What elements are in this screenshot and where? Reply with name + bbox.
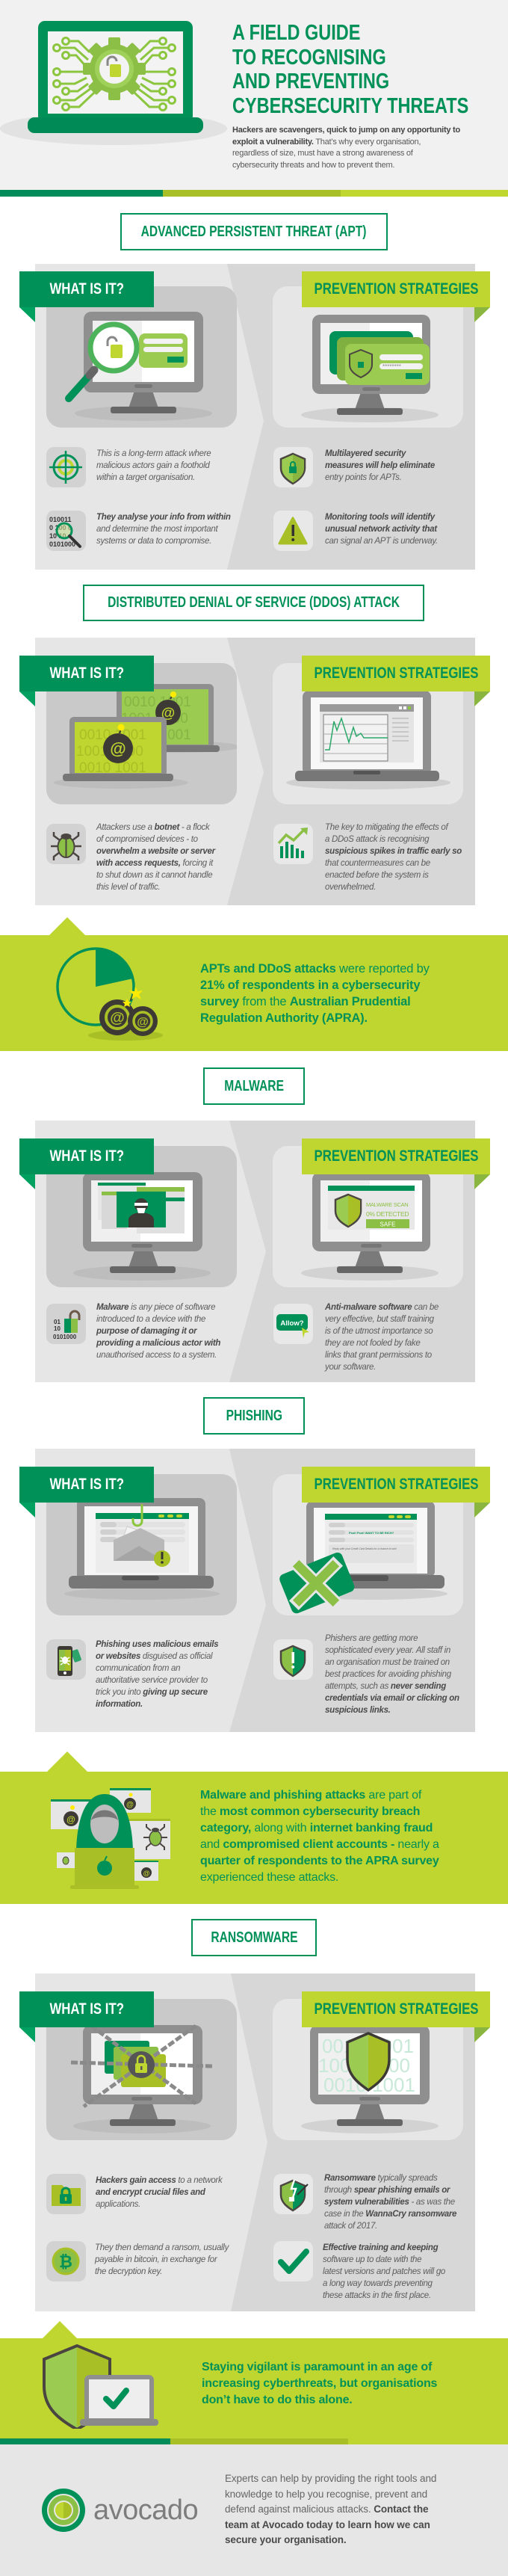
title: A FIELD GUIDE [232, 21, 360, 45]
text: APT what 1 [96, 449, 211, 482]
logo: avocado: avocado [93, 2495, 198, 2526]
text: APT prevention 1: entry points for APTs. [325, 473, 402, 482]
DDoS image: infected laptops: 1001 0100 [121, 711, 188, 727]
panel: Ransomware [35, 1973, 475, 2311]
icon: binary magnifier [46, 511, 86, 551]
icon: binary magnifier: 10 10 [49, 532, 66, 540]
stat text 1: Regulation Authority (APRA). [200, 1011, 368, 1025]
text: Phishing what: authoritative service provider to [96, 1676, 208, 1685]
Phishing image: blocked credit card: Psst! Psst! WANT TO BE RICH? [349, 1531, 394, 1535]
title: AND PREVENTING [232, 70, 389, 93]
hacker illustration [51, 1788, 170, 1889]
text: Ransomware what 1: applications. [96, 2200, 140, 2209]
DDoS image: infected laptops: @ [110, 739, 126, 758]
footer text: defend against malicious attacks. Contact the [225, 2503, 428, 2515]
icon: shield exclamation [273, 1639, 313, 1680]
DDoS image: infected laptops: 0010 1001 [124, 694, 191, 710]
stat text 1: survey from the Australian Prudential [200, 995, 410, 1008]
intro text: cybersecurity threats and how to prevent them. [232, 160, 394, 169]
section title: DDoS [83, 585, 424, 621]
logo: avocado [42, 2489, 198, 2532]
text: Ransomware prevention 2: a long way towards preventing [323, 2279, 433, 2288]
icon: binary magnifier: 010011 [49, 516, 72, 523]
text: DDoS prevention [325, 823, 462, 892]
text: APT what 2 [96, 513, 231, 546]
text: APT prevention 2 [325, 513, 438, 546]
text: Malware what: unauthorised access to a system. [96, 1351, 217, 1360]
icon: binary lock: 01 [54, 1319, 61, 1325]
closing text [202, 2361, 437, 2406]
text: DDoS what: overwhelm a website or server [96, 847, 215, 856]
text: DDoS prevention: enacted before the system is [325, 871, 429, 880]
text: Ransomware prevention 2: software up to date with the [323, 2255, 421, 2264]
intro text: Hackers are scavengers, quick to jump on any opportunity to [232, 126, 460, 135]
panel: DDoS [35, 638, 475, 905]
icon: binary magnifier: 0 100 0 [49, 524, 72, 531]
text: DDoS prevention: that countermeasures can be [325, 859, 430, 868]
Ransomware image: shield over binary: 0010 1001 [322, 2035, 414, 2057]
text: APT what 2: and determine the most important [96, 525, 217, 534]
section title: Phishing: PHISHING [226, 1407, 282, 1423]
text: Malware prevention: very effective, but staff training [325, 1315, 434, 1324]
text: Phishing prevention: suspicious links. [325, 1706, 391, 1715]
pie chart icon with bombs: @ [110, 1010, 125, 1026]
header background [0, 0, 508, 191]
text: Phishing what: Phishing uses malicious emails [96, 1640, 218, 1649]
text: DDoS what: of compromised devices - to [96, 835, 198, 844]
tab: what is it [19, 1138, 154, 1174]
Phishing image: blocked credit card: Reply with your Credit Card Details for a chance to win! [332, 1547, 397, 1550]
panel: APT [35, 264, 475, 570]
title: TO RECOGNISING [232, 45, 386, 69]
text: APT what 1: This is a long-term attack where [96, 449, 211, 458]
stat text 2: category, along with internet banking fraud [200, 1822, 433, 1834]
icon: bitcoin: ₿ [59, 2253, 72, 2272]
hacker illustration: 1001 [82, 1827, 122, 1847]
icon: binary lock: 0101000 [53, 1334, 77, 1340]
text: Malware what: providing a malicious actor with [96, 1339, 220, 1348]
Ransomware image: shield over binary: 1001 0100 [318, 2054, 410, 2077]
text: Ransomware prevention 2 [323, 2243, 445, 2300]
icon: locked folder [46, 2174, 86, 2214]
tab: what is it: WHAT IS IT? [49, 1476, 124, 1493]
title: CYBERSECURITY THREATS [232, 94, 468, 118]
icon: bug [46, 824, 86, 864]
text: Malware prevention: they are not fooled by fake [325, 1339, 420, 1348]
tab: what is it [19, 1991, 154, 2027]
text: Ransomware prevention 2: Effective training and keeping [323, 2243, 438, 2252]
text: DDoS prevention: a DDoS attack is recognising [325, 835, 429, 844]
text: APT prevention 1: measures will help eliminate [325, 461, 435, 470]
text: Phishing prevention: sophisticated every year. All staff in [325, 1646, 450, 1655]
header stripe [0, 190, 508, 197]
text: Phishing what: trick you into giving up secure [96, 1688, 208, 1697]
closing text: increasing cyberthreats, but organisations [202, 2377, 437, 2390]
stat text 2: and compromised client accounts - nearly a [200, 1838, 439, 1851]
icon: shield with lightning [273, 2174, 313, 2214]
DDoS image: infected laptops: 1001 0100 [76, 744, 143, 759]
Phishing image: blocked credit card [273, 1474, 463, 1615]
hacker illustration: 00 [86, 1848, 106, 1868]
text: DDoS prevention: suspicious spikes in traffic early so [325, 847, 462, 856]
icon: allow prompt: Allow? [280, 1319, 304, 1328]
icon: allow prompt [273, 1304, 313, 1344]
DDoS image: infected laptops: 0010 1001 [79, 727, 146, 743]
text: Malware prevention: your software. [325, 1363, 376, 1372]
tab: what is it [19, 1467, 154, 1503]
bottom stripe [0, 2438, 508, 2444]
text: Ransomware what 1: and encrypt crucial files and [96, 2188, 205, 2197]
text: DDoS prevention: The key to mitigating the effects of [325, 823, 447, 832]
Malware image: malware scan safe: 0% DETECTED [366, 1210, 409, 1218]
text: DDoS what [96, 823, 216, 892]
DDoS image: infected laptops: 0010 1001 [124, 727, 191, 743]
icon: phone with bug [46, 1639, 86, 1680]
APT image: secure login cards on monitor [273, 286, 463, 428]
Ransomware image: chained locked files [46, 1999, 237, 2140]
text: DDoS what: to shut down as it cannot handle [96, 871, 212, 880]
text: DDoS what: with access requests, forcing it [96, 859, 213, 868]
intro text: exploit a vulnerability. That’s why every organisation, [232, 138, 421, 147]
Malware image: hacker on monitor [46, 1146, 237, 1287]
text: Malware prevention: Anti-malware software can be [325, 1303, 439, 1312]
DDoS image: infected laptops: @ [161, 706, 175, 721]
tab: prevention strategies: PREVENTION STRATEGIES [314, 1147, 478, 1165]
tab: prevention strategies: PREVENTION STRATEGIES [314, 280, 478, 298]
text: APT prevention 1: Multilayered security [325, 449, 406, 458]
section title: Ransomware: RANSOMWARE [211, 1929, 297, 1945]
title [232, 21, 468, 118]
text: APT prevention 1 [325, 449, 435, 482]
APT image: secure login cards on monitor: ******** [382, 363, 401, 370]
section title: Ransomware [191, 1919, 317, 1956]
text: Malware what: purpose of damaging it or [96, 1327, 196, 1336]
section title: Malware: MALWARE [224, 1078, 284, 1094]
footer text: secure your organisation. [225, 2534, 347, 2545]
tab: prevention strategies [302, 656, 490, 691]
footer text: knowledge to help you recognise, prevent and [225, 2488, 427, 2500]
stat text 1 [200, 962, 430, 1025]
icon: binary lock: 10 [54, 1325, 61, 1332]
icon: bitcoin [46, 2241, 86, 2281]
icon: shield lock [273, 447, 313, 487]
text: Ransomware what 1 [96, 2176, 223, 2209]
closing text: Staying vigilant is paramount in an age of [202, 2361, 432, 2373]
stat text 1: APTs and DDoS attacks were reported by [200, 962, 430, 976]
text: DDoS prevention: overwhelmed. [325, 883, 376, 892]
stat text 2 [200, 1789, 439, 1884]
closing band [0, 2338, 508, 2438]
text: DDoS what: Attackers use a botnet - a flock [96, 823, 209, 832]
tab: prevention strategies [302, 271, 490, 307]
text: APT prevention 2: unusual network activity that [325, 525, 437, 534]
Malware image: malware scan safe: MALWARE SCAN [366, 1201, 408, 1208]
text: Ransomware what 2: payable in bitcoin, in exchange for [95, 2255, 217, 2264]
stat text 2: the most common cybersecurity breach [200, 1805, 420, 1818]
stat text 2: quarter of respondents to the APRA survey [200, 1855, 439, 1867]
tab: what is it [19, 656, 154, 691]
section title: DDoS: DISTRIBUTED DENIAL OF SERVICE (DDOS) ATTACK [108, 594, 400, 611]
Malware image: malware scan safe [273, 1146, 463, 1287]
text: Phishing prevention: attempts, such as never sending [325, 1682, 446, 1691]
text: APT what 2: They analyse your info from within [96, 513, 231, 522]
footer text: Experts can help by providing the right tools and [225, 2473, 436, 2484]
text: Malware prevention: links that grant permissions to [325, 1351, 432, 1360]
text: Ransomware what 2: the decryption key. [95, 2267, 162, 2276]
footer [0, 2444, 508, 2576]
footer text: team at Avocado today to learn how we can [225, 2519, 430, 2530]
text: Phishing prevention: credentials via email or clicking on [325, 1694, 459, 1703]
footer text [225, 2473, 436, 2545]
tab: prevention strategies: PREVENTION STRATEGIES [314, 665, 478, 682]
section title: Malware [203, 1067, 305, 1105]
text: DDoS what: this level of traffic. [96, 883, 160, 892]
closing text: don’t have to do this alone. [202, 2394, 353, 2406]
text: Ransomware prevention 2: these attacks in the first place. [323, 2291, 431, 2300]
text: Phishing prevention: an organisation must be trained on [325, 1658, 450, 1667]
section title: APT [120, 213, 388, 250]
text: Ransomware prevention 1: system vulnerabilities - as was the [324, 2198, 455, 2207]
tab: what is it [19, 271, 154, 307]
tab: prevention strategies: PREVENTION STRATEGIES [314, 1476, 478, 1493]
icon: binary magnifier: 0101000 [49, 540, 75, 548]
Malware image: malware scan safe: SAFE [380, 1221, 395, 1227]
intro text [232, 126, 460, 169]
text: Ransomware what 2: They then demand a ransom, usually [95, 2243, 229, 2252]
text: Malware prevention: is of the utmost importance so [325, 1327, 433, 1336]
tab: what is it: WHAT IS IT? [49, 1147, 124, 1165]
text: Phishing what: communication from an [96, 1664, 180, 1673]
text: APT prevention 2: can signal an APT is underway. [325, 537, 438, 546]
text: Ransomware what 2 [94, 2243, 229, 2276]
APT image: magnifier on monitor [46, 286, 237, 428]
icon: shield and laptop check [43, 2344, 158, 2429]
text: Ransomware prevention 1 [324, 2174, 457, 2231]
DDoS image: infected laptops [46, 663, 237, 804]
header laptop illustration [0, 21, 227, 145]
text: Ransomware what 1: Hackers gain access to a network [96, 2176, 222, 2185]
icon: binary lock [46, 1304, 86, 1344]
tab: prevention strategies [302, 1138, 490, 1174]
text: Phishing prevention [325, 1634, 459, 1715]
text: APT what 1: within a target organisation. [96, 473, 195, 482]
text: Phishing what: or websites disguised as official [96, 1652, 212, 1661]
stat text 2: experienced these attacks. [200, 1871, 338, 1884]
text: Ransomware prevention 1: Ransomware typically spreads [324, 2174, 437, 2183]
text: Ransomware prevention 2: latest versions and patches will go [323, 2267, 445, 2276]
hacker illustration: @ [126, 1801, 134, 1809]
Ransomware image: shield over binary: 0010 1001 [323, 2074, 415, 2096]
icon: checkmark [273, 2241, 313, 2281]
Ransomware image: shield over binary [273, 1999, 463, 2140]
stat band: malware and phishing statistic [0, 1772, 508, 1904]
hacker illustration: @ [66, 1814, 75, 1825]
text: Ransomware prevention 1: through spear phishing emails or [324, 2186, 450, 2195]
text: APT what 1: malicious actors gain a foothold [96, 461, 209, 470]
icon: warning [273, 511, 313, 551]
tab: prevention strategies [302, 1467, 490, 1503]
stat band: APT and DDoS statistic [0, 935, 508, 1051]
icon: bar chart arrow [273, 824, 313, 864]
text: APT prevention 2: Monitoring tools will identify [325, 513, 435, 522]
section title: APT: ADVANCED PERSISTENT THREAT (APT) [141, 223, 367, 239]
pie chart icon with bombs: @ [137, 1016, 149, 1029]
text: Malware what [96, 1303, 220, 1360]
text: Phishing what [96, 1640, 218, 1709]
pie chart icon with bombs [56, 947, 163, 1041]
tab: prevention strategies: PREVENTION STRATEGIES [314, 2000, 478, 2018]
tab: prevention strategies [302, 1991, 490, 2027]
text: Ransomware prevention 1: attack of 2017. [324, 2222, 377, 2231]
stat text 2: Malware and phishing attacks are part of [200, 1789, 421, 1802]
text: Phishing prevention: best practices for avoiding phishing [325, 1670, 451, 1679]
tab: what is it: WHAT IS IT? [49, 280, 124, 298]
text: Phishing prevention: Phishers are getting more [325, 1634, 418, 1643]
Phishing image: hooked email laptop [46, 1474, 237, 1615]
hacker illustration: @ [143, 1870, 150, 1877]
DDoS image: infected laptops: 0010 1001 [79, 760, 146, 776]
intro text: regardless of size, must have a strong awareness of [232, 149, 413, 158]
text: Malware prevention [324, 1303, 439, 1372]
tab: what is it: WHAT IS IT? [49, 665, 124, 682]
text: Phishing what: information. [96, 1700, 143, 1709]
DDoS image: traffic chart laptop [273, 663, 463, 804]
icon: target [46, 447, 86, 487]
text: Malware what: introduced to a device with the [96, 1315, 205, 1324]
text: APT what 2: systems or data to compromise. [96, 537, 211, 546]
text: Malware what: Malware is any piece of software [96, 1303, 215, 1312]
section title: Phishing [203, 1397, 305, 1435]
tab: what is it: WHAT IS IT? [49, 2000, 124, 2018]
stat text 1: 21% of respondents in a cybersecurity [200, 979, 420, 992]
panel: Phishing [35, 1449, 475, 1732]
panel: Malware [35, 1121, 475, 1382]
text: Ransomware prevention 1: case in the WannaCry ransomware [324, 2210, 456, 2219]
